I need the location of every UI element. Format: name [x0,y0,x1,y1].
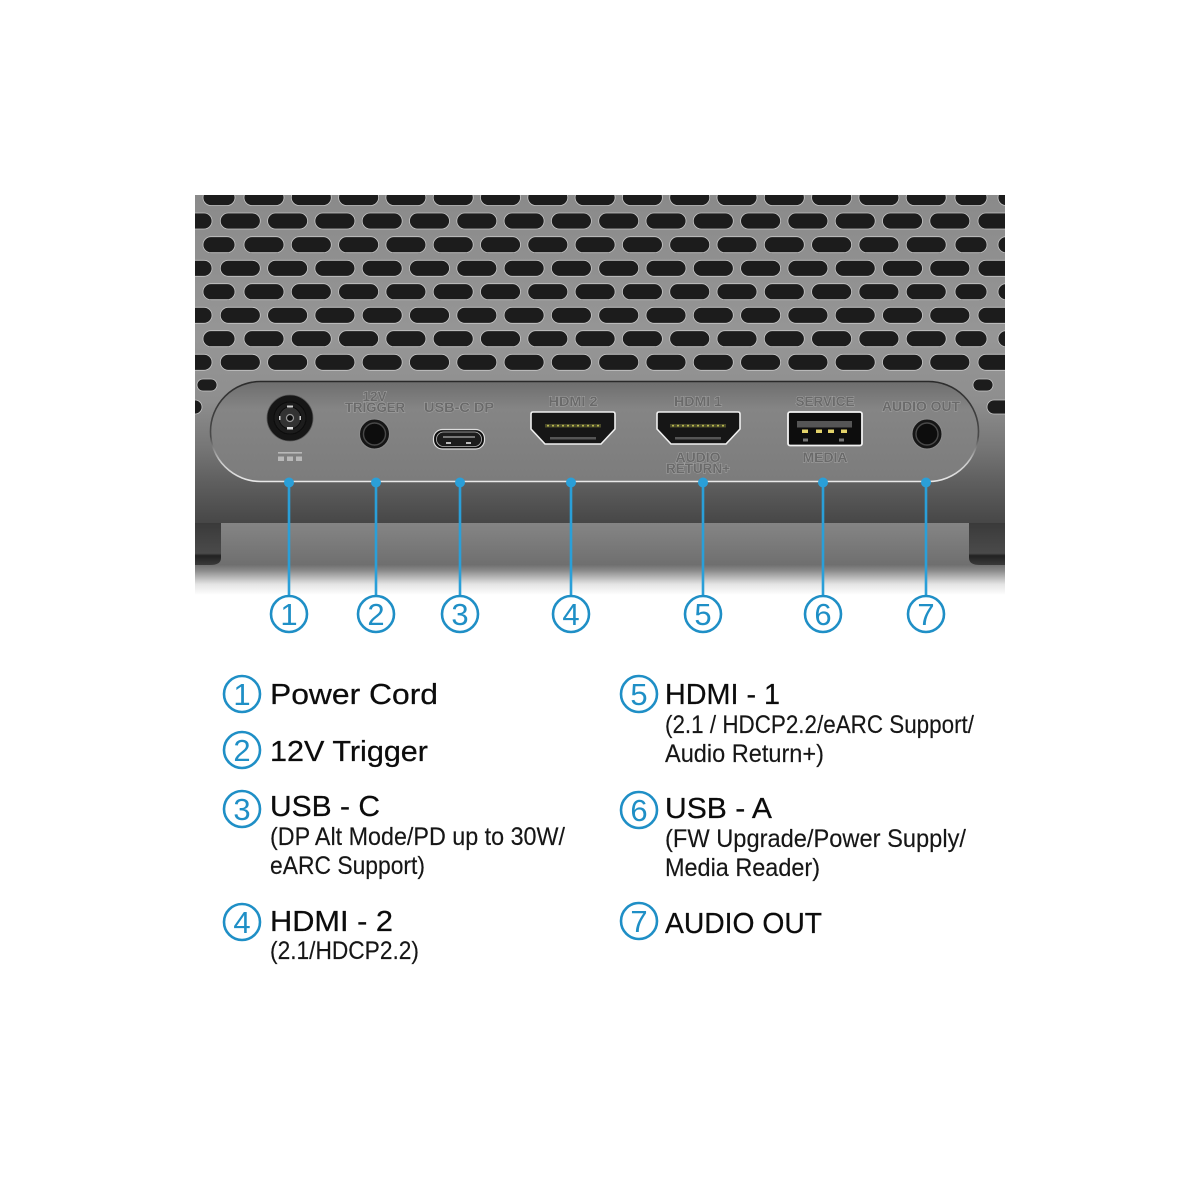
port labels: HDMI 1 [674,394,723,409]
callout numbers [271,596,944,632]
legend: power cord: Power Cord [270,679,438,711]
legend: HDMI 1: Audio Return+) [665,740,824,768]
legend: HDMI 2 [224,904,419,965]
grille housing [195,195,1005,482]
icon: power jack [267,395,313,441]
legend: USB-A: Media Reader) [665,854,820,882]
port labels: HDMI 2 [548,394,598,409]
ventilation slots [180,190,1030,414]
legend: power cord: 1 [233,677,251,712]
legend: 12V trigger [224,732,429,768]
projector rear photo [180,190,1030,595]
port labels: 12V [362,389,386,404]
legend: USB-A [621,792,966,882]
port labels: AUDIO [676,450,720,465]
callout numbers: 7 [917,597,935,632]
legend: HDMI 1 [621,676,974,768]
callout leaders [284,478,931,596]
icon: HDMI 1 port [657,412,740,444]
callout numbers: 2 [367,597,385,632]
legend: USB-C: 3 [233,792,251,827]
port labels: USB-C DP [424,400,494,415]
legend: HDMI 1: (2.1 / HDCP2.2/eARC Support/ [665,711,974,739]
port panel [210,382,978,482]
legend: HDMI 1: HDMI - 1 [665,679,780,711]
legend: USB-C: eARC Support) [270,852,425,880]
port labels [345,389,961,476]
legend: USB-C [224,791,565,880]
legend: audio out [621,903,822,940]
icon: 12V jack [360,419,390,449]
callout numbers: 6 [814,597,832,632]
panel plate [210,382,978,482]
legend: USB-A: USB - A [665,793,772,825]
left foot [195,523,221,565]
legend: power cord [224,676,438,712]
icon: HDMI 2 port [531,412,615,444]
legend: 12V trigger: 2 [233,733,251,768]
legend: USB-A: (FW Upgrade/Power Supply/ [665,825,966,853]
lower housing [195,482,1005,523]
legend: HDMI 2: (2.1/HDCP2.2) [270,937,419,965]
legend: audio out: AUDIO OUT [665,908,822,940]
legend: HDMI 1: 5 [630,677,648,712]
port labels: MEDIA [802,450,848,465]
icon: audio jack [912,419,942,449]
legend: USB-C: USB - C [270,791,380,823]
callout numbers: 3 [451,597,469,632]
port labels: RETURN+ [666,461,730,476]
icon: USB-A port [788,412,862,446]
legend: HDMI 2: 4 [233,905,251,940]
legend: audio out: 7 [630,904,648,939]
legend: HDMI 2: HDMI - 2 [270,906,393,938]
legend: 12V trigger: 12V Trigger [270,736,429,768]
legend: USB-A: 6 [630,793,648,828]
icon: DC symbol [278,452,302,461]
port labels: AUDIO OUT [882,399,961,414]
callout numbers: 1 [280,597,298,632]
port labels: TRIGGER [345,400,405,415]
port labels: SERVICE [796,394,854,409]
legend: USB-C: (DP Alt Mode/PD up to 30W/ [270,823,565,851]
callout numbers: 4 [562,597,580,632]
right foot [969,523,1005,565]
icon: USB-C port [434,430,484,449]
callout numbers: 5 [694,597,712,632]
floor shadow [195,523,1005,595]
